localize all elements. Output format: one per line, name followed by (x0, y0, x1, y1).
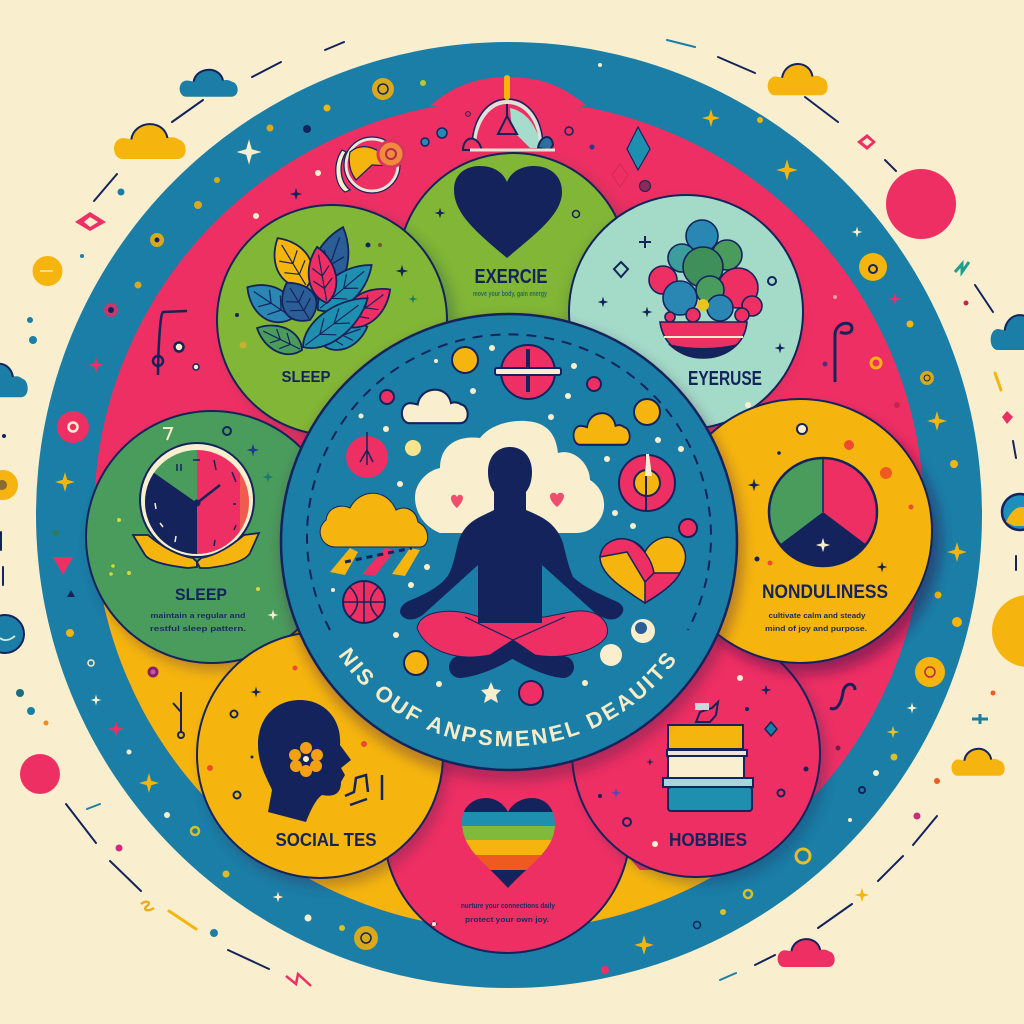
clock panel caption: restful sleep pattern. (150, 626, 246, 633)
outer circles (0, 169, 1024, 794)
panel: hobbies (572, 629, 820, 877)
leaf panel label: SLEEP (282, 369, 331, 386)
heart panel caption (461, 903, 555, 924)
pink area decorations (148, 112, 900, 750)
panel: exercise heart (398, 153, 628, 383)
centre small icons (343, 345, 697, 705)
dashed ring (307, 334, 711, 630)
dots inside centre (331, 345, 684, 687)
bowl panel label: EYERUSE (688, 368, 762, 390)
mindfulness caption: mind of joy and purpose. (765, 626, 867, 633)
shadow under mindfulness panel (675, 408, 941, 674)
clock panel caption: maintain a regular and (150, 613, 246, 620)
panel: centre meditation disc (280, 312, 738, 772)
chart: three-part pie (769, 458, 877, 570)
clock panel label: SLEEP (175, 585, 227, 604)
icon: two small hearts (451, 493, 564, 508)
icon: clock in hands (130, 443, 259, 568)
icon: broken heart (600, 537, 686, 603)
icon: yellow cloud (574, 413, 630, 445)
panel: bowl (569, 195, 803, 429)
icon: book stack (663, 702, 753, 811)
shadow under exercise panel (404, 156, 636, 388)
icon: spiral circle (336, 137, 404, 193)
icon: cream cloud (402, 390, 468, 423)
panel: leaves sleep (217, 205, 447, 435)
shadow under social panel (201, 639, 449, 887)
icon: navy heart (454, 166, 562, 258)
panel: pie chart mindfulness (710, 398, 933, 664)
icon: head silhouette with flower (258, 700, 382, 822)
ring decorations: stars and dots (53, 63, 967, 974)
exercise caption: move your body, gain energy (473, 291, 547, 298)
icon: large thought cloud (415, 421, 604, 533)
meditating figure (400, 447, 623, 667)
inner pink and yellow disc (60, 77, 924, 960)
curved title: NIS OUF ANPSMENEL DEAUITS (338, 647, 675, 746)
heart panel caption: protect your own joy. (465, 917, 549, 924)
icon: rainbow heart (462, 798, 555, 888)
hobbies label: HOBBIES (669, 830, 747, 850)
icon: salad bowl (649, 220, 762, 358)
exercise label: EXERCIE (474, 266, 548, 288)
mindfulness caption: cultivate calm and steady (768, 613, 866, 620)
social label: SOCIAL TES (276, 830, 376, 850)
panel: clock sleep (85, 410, 301, 664)
shadow of centre disc (280, 318, 744, 782)
panel: social ties (197, 632, 443, 878)
icon: star (481, 682, 501, 703)
clock panel caption (150, 613, 246, 633)
shadow under hobbies panel (579, 637, 827, 885)
icon: storm cloud and rain (320, 493, 428, 576)
panel: bottom heart (386, 762, 628, 954)
shadow under mint panel (565, 201, 799, 435)
icon: leaf cluster (238, 222, 399, 361)
heart panel caption: nurture your connections daily (461, 903, 555, 910)
mindfulness label: NONDULINESS (762, 582, 888, 603)
icon: ring symbol at top (463, 75, 555, 150)
shadow under leaf panel (224, 210, 456, 442)
mindfulness caption (765, 613, 867, 633)
shadow under clock panel (90, 419, 342, 671)
